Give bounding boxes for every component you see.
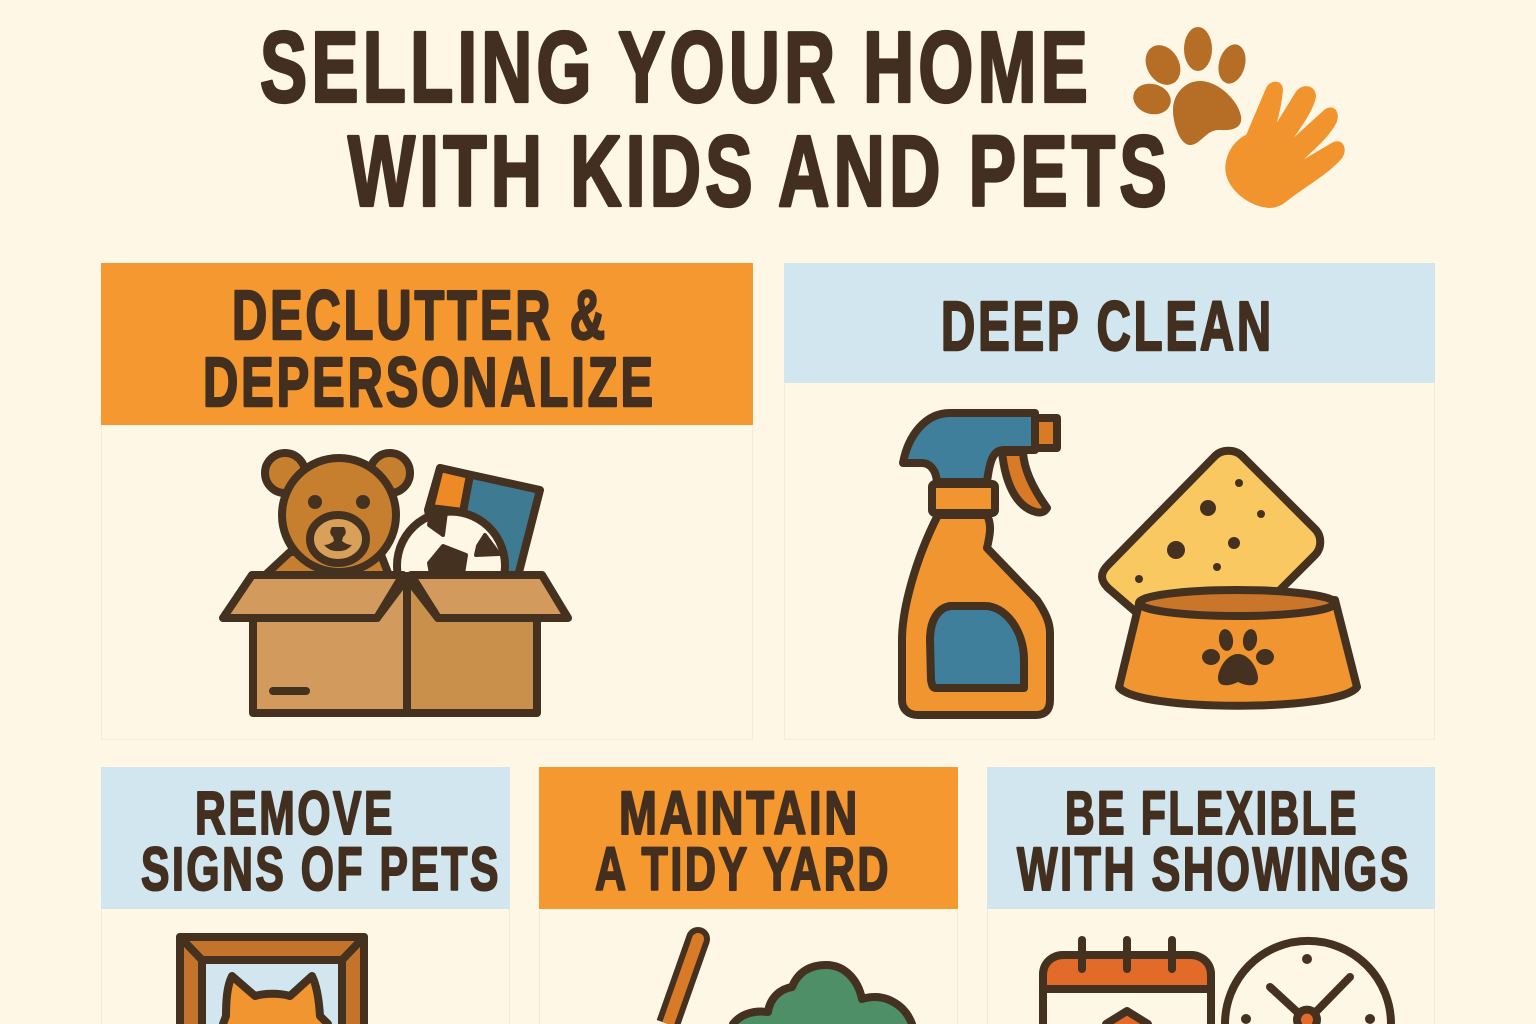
icon: pet bowl with paw xyxy=(1119,590,1357,706)
icon: spray bottle xyxy=(902,413,1057,715)
heading: remove signs of pets xyxy=(141,779,501,903)
teddy bear xyxy=(262,453,410,578)
icon: orange child hand print xyxy=(1226,82,1344,207)
heading: declutter and depersonalize xyxy=(203,276,656,421)
heading: maintain a tidy yard: MAINTAIN xyxy=(619,779,860,847)
soccer ball xyxy=(397,512,505,576)
title xyxy=(260,12,1171,228)
icon: clock xyxy=(1225,941,1391,1024)
panel: be flexible with showings xyxy=(987,767,1435,1024)
panel: maintain a tidy yard xyxy=(539,767,958,1024)
heading: be flexible with showings xyxy=(1017,779,1411,903)
heading: remove signs of pets: SIGNS OF PETS xyxy=(141,835,501,903)
title: SELLING YOUR HOME xyxy=(260,12,1092,124)
icon: framed cat picture xyxy=(180,937,364,1024)
heading: be flexible with showings: BE FLEXIBLE xyxy=(1065,779,1359,847)
title: WITH KIDS AND PETS xyxy=(348,116,1171,228)
book xyxy=(428,468,540,576)
panel: deep clean xyxy=(784,263,1435,740)
icon: box with teddy bear, ball and book xyxy=(223,453,568,713)
heading: maintain a tidy yard: A TIDY YARD xyxy=(595,835,891,903)
heading: declutter and depersonalize: DEPERSONALIZE xyxy=(203,343,656,421)
heading: deep clean: DEEP CLEAN xyxy=(941,287,1274,365)
panel: remove signs of pets xyxy=(101,767,510,1024)
icon: rake handle xyxy=(668,927,710,1024)
icon: sponge xyxy=(1102,451,1320,620)
cardboard box xyxy=(223,575,568,713)
panel: declutter and depersonalize xyxy=(101,263,753,740)
icon: brown paw print xyxy=(1130,27,1250,145)
heading: declutter and depersonalize: DECLUTTER & xyxy=(232,276,608,354)
icon: calendar xyxy=(1043,940,1211,1024)
icon: green bush xyxy=(733,965,912,1024)
heading: remove signs of pets: REMOVE xyxy=(195,779,395,847)
heading: maintain a tidy yard xyxy=(595,779,891,903)
